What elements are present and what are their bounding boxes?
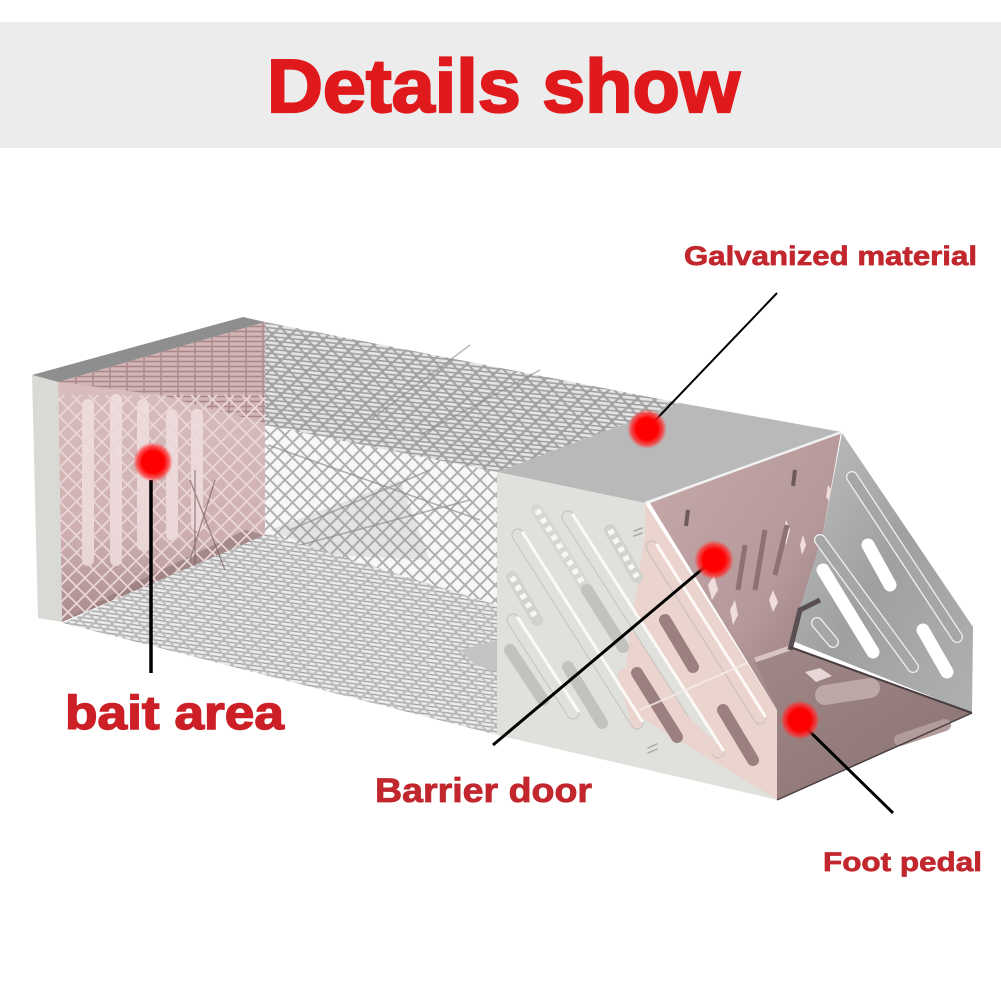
marker dot: foot pedal xyxy=(780,700,820,740)
title banner xyxy=(0,22,1001,148)
label: bait area: bait area xyxy=(65,686,285,739)
mesh cage: back wall xyxy=(265,425,497,605)
interior: barrier door xyxy=(650,432,841,710)
door box: pink side face xyxy=(623,503,778,800)
rim: bright front edge xyxy=(645,432,842,503)
leader line: bait area xyxy=(149,480,153,673)
label: barrier door: Barrier door xyxy=(375,772,592,810)
label: galvanized material: Galvanized material xyxy=(684,241,977,271)
marker dot: bait area xyxy=(133,442,173,482)
title text: Details show xyxy=(267,44,741,128)
frame: end left strip xyxy=(32,375,62,622)
mesh cage: floor xyxy=(63,533,497,735)
slots: gray right wall xyxy=(817,477,957,672)
frame: end top strip xyxy=(32,317,265,382)
trap illustration xyxy=(32,317,973,800)
label: foot pedal: Foot pedal xyxy=(823,847,982,877)
leader line: foot pedal xyxy=(800,722,893,813)
slots: pale and pink faces xyxy=(510,510,765,760)
interior: door details xyxy=(686,470,835,625)
marker dot: galvanized material xyxy=(627,409,667,449)
interior: foot pedal floor xyxy=(753,600,972,800)
door box: top face xyxy=(497,403,842,503)
mesh cage: top xyxy=(265,322,680,472)
interior: gray right wall xyxy=(790,433,973,713)
marker dot: barrier door xyxy=(694,540,734,580)
leader line: galvanized material xyxy=(648,293,777,428)
door box: pale side face xyxy=(497,472,778,800)
leader line: barrier door xyxy=(493,560,713,745)
bait area end panel xyxy=(58,322,265,622)
